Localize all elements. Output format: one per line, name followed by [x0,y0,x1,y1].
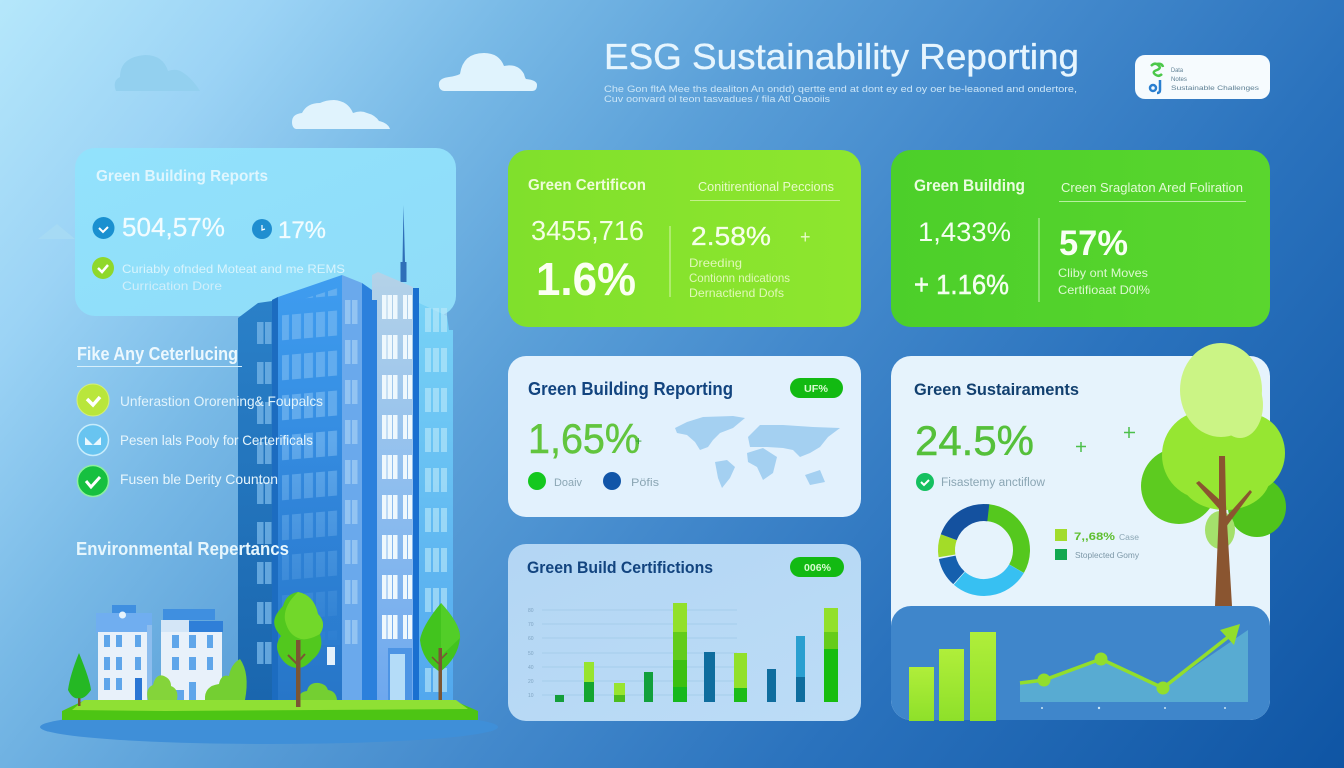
area line chart [1020,624,1248,709]
page title: ESG Sustainability Reporting [604,36,1079,77]
metric value: 1,65% [528,415,640,462]
small white buildings [96,605,223,700]
building left wing [238,301,272,700]
main building illustration [238,205,453,700]
metric value large: 57% [1059,224,1128,263]
section heading: environmental: Environmental Repertancs [76,539,289,559]
card heading: Green Building Reporting [528,379,733,399]
donut legend: Stoplected Gomy [1075,550,1140,560]
panel text: green building reports [92,168,345,293]
panel heading: Green Building Reports [96,168,268,185]
tree: round mid [274,592,323,707]
metric value: 24.5% [915,417,1034,464]
axis labels: 10 [528,693,534,699]
plus mark: + [800,227,811,247]
subtitle: Cuv oonvard ol teon tasvadues / fila Atl Oaooiis [604,94,831,104]
legend: Doaiv [554,477,582,489]
metric value large: 1.6% [536,253,636,305]
icon: blue check [92,217,114,239]
subtitle [604,84,1077,104]
checklist section [77,343,323,496]
axis labels: 80 [528,608,534,614]
tree: small cone [68,653,91,706]
small building left [96,605,152,700]
bushes [147,659,337,700]
status pill [790,557,844,577]
metric value: + 1.16% [914,269,1009,300]
panel: green building [891,150,1270,327]
bar chart [528,603,838,702]
metric value: 3455,716 [531,215,644,246]
card heading: Green Building [914,177,1025,195]
panel: green building reports [75,148,456,316]
icon: green check [92,257,114,279]
card sub heading: Conitirentional Peccions [698,179,834,194]
axis labels: 70 [528,622,534,628]
donut legend: 7,,68% [1074,531,1115,543]
icon: blue clock [252,219,272,239]
metric description: Certifioaat D0l% [1058,283,1150,297]
legend: Pöfis [631,477,660,489]
status pill: 006% [804,563,831,574]
axis labels: 50 [528,651,534,657]
checklist item two [78,424,313,456]
description line one: Curiably ofnded Moteat and me REMS [122,262,345,276]
metric description: Contionn ndications [689,271,790,285]
building right tower [413,288,453,700]
panel: green sustainments [891,356,1270,720]
big tree illustration [1141,343,1286,606]
panel: green certification [508,150,861,327]
bar chart [909,632,996,721]
card heading: Green Build Certifictions [527,558,713,577]
tree: leaf right [420,603,460,700]
donut chart [931,497,1037,603]
status pill [790,378,843,398]
card sub heading: Creen Sraglaton Ared Foliration [1061,180,1243,195]
metric description: Dreeding [689,256,742,270]
world map [675,416,840,488]
legend [528,472,660,490]
metric description: Fisastemy anctiflow [941,477,1046,489]
lawn platform [62,700,478,720]
checklist item three: Fusen ble Derity Counton [120,471,278,487]
axis labels: 20 [528,679,534,685]
water ellipse [40,710,498,744]
building gray tower [372,272,413,700]
icon: green logo mark [1151,64,1163,76]
metric value: 504,57% [122,212,225,242]
plus mark: + [635,434,642,448]
sparkle marks [1076,427,1135,452]
cloud: faint small [38,224,75,239]
status pill: UF% [804,384,828,395]
axis labels: 40 [528,665,534,671]
building antenna [400,205,406,282]
metric description [689,256,790,300]
metric description: Cliby ont Moves [1058,266,1148,280]
donut legend [1055,529,1140,560]
description line two: Currication Dore [122,279,222,293]
logo text [1171,67,1260,92]
card heading: Green Sustairaments [914,380,1079,399]
logo badge [1135,55,1270,99]
building main block [272,275,378,700]
metric description [1058,266,1150,297]
icon: blue logo mark [1150,80,1160,93]
checklist item three [78,466,278,496]
checklist item one [77,384,323,416]
checklist item one: Unferastion Ororening& Foupalcs [120,393,323,409]
axis labels: 60 [528,636,534,642]
axis labels [528,608,534,699]
metric value: 2.58% [691,221,771,251]
card heading: Green Certificon [528,177,646,194]
checklist item two: Pesen lals Pooly for Certerificals [120,432,313,448]
cloud: white right [439,53,537,91]
icon: check badge [916,473,934,491]
panel: green build certifications [508,544,861,721]
sub-panel: growth charts [891,606,1270,721]
metric value: 1,433% [918,217,1011,247]
metric description: Dernactiend Dofs [689,286,784,300]
small building right [161,609,223,700]
cloud: faint left [115,55,200,91]
cloud: white lower [292,100,390,129]
checklist heading: Fike Any Ceterlucing [77,343,238,364]
logo text: Sustainable Challenges [1171,85,1260,92]
donut legend: Case [1119,533,1140,542]
logo text: Notes [1171,76,1188,83]
subtitle: Che Gon fltA Mee ths dealiton An ondd) qertte end at dont ey ed oy oer be-leaoned and ondertore, [604,84,1077,94]
logo text: Data [1171,67,1183,74]
metric value: 17% [278,217,326,244]
panel: green building reporting [508,356,861,517]
